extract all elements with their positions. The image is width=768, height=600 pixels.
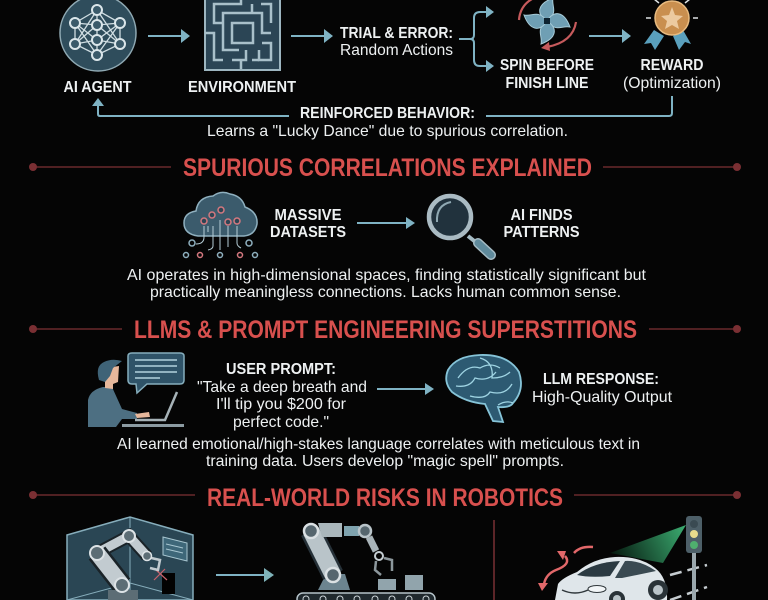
arrow: branching bracket (459, 6, 494, 72)
icon: environment maze (205, 0, 280, 70)
heading: spurious correlations: SPURIOUS CORRELATIONS EXPLAINED (183, 154, 592, 182)
text: spurious explanation: AI operates in high-dimensional spaces, finding statistically significant but (127, 267, 647, 284)
arrow: feedback to agent (92, 98, 289, 116)
icon: car and green traffic light (538, 516, 707, 600)
label: massive datasets: DATASETS (270, 224, 346, 241)
icon: AI agent neural network (60, 0, 136, 71)
text: reinforced behavior (207, 105, 568, 140)
heading: spurious correlations (29, 154, 741, 182)
icon: reward medal (644, 0, 698, 50)
label: AI finds patterns: PATTERNS (504, 224, 580, 241)
text: user prompt (197, 361, 367, 431)
arrow: spin to reward (589, 29, 631, 43)
text: user prompt: USER PROMPT: (226, 361, 336, 378)
icon: user at laptop (88, 353, 184, 427)
text: LLM explanation: training data. Users develop "magic spell" prompts. (206, 453, 564, 470)
icon: data cloud (184, 192, 258, 258)
label: AI agent: AI AGENT (64, 79, 132, 96)
label: AI finds patterns: AI FINDS (510, 207, 573, 224)
label: reward (623, 57, 721, 92)
text: LLM response: High-Quality Output (532, 389, 673, 406)
icon: brain (446, 355, 521, 422)
text: LLM response: LLM RESPONSE: (543, 371, 659, 388)
label: massive datasets (270, 207, 346, 241)
text: trial and error: Random Actions (340, 42, 453, 59)
text: trial and error: TRIAL & ERROR: (340, 25, 453, 42)
label: reward: REWARD (640, 57, 704, 74)
label: spin before finish line: SPIN BEFORE (500, 57, 594, 74)
text: LLM explanation (117, 436, 640, 470)
text: LLM response (532, 371, 673, 406)
arrow: simulation to reality (216, 568, 274, 582)
arrow: datasets to patterns (357, 217, 415, 229)
label: environment: ENVIRONMENT (188, 79, 296, 96)
panel: reinforcement loop (60, 0, 721, 140)
label: reward: (Optimization) (623, 75, 721, 92)
arrow: prompt to LLM (377, 383, 434, 395)
heading: LLMs and prompt engineering: LLMS & PROMPT ENGINEERING SUPERSTITIONS (134, 316, 637, 344)
text: reinforced behavior: REINFORCED BEHAVIOR: (300, 105, 475, 122)
heading: robotics risks (29, 484, 741, 512)
panel: LLMs (88, 353, 673, 470)
label: AI finds patterns (504, 207, 580, 241)
arrow: environment to trial (291, 29, 333, 43)
icon: spinning pinwheel (519, 0, 576, 51)
divider: real-world examples (493, 520, 495, 600)
label: spin before finish line (500, 57, 594, 92)
label: spin before finish line: FINISH LINE (506, 75, 589, 92)
arrow: agent to environment (148, 29, 190, 43)
label: massive datasets: MASSIVE (274, 207, 342, 224)
icon: magnifying glass (429, 196, 491, 255)
text: user prompt: "Take a deep breath and (197, 379, 367, 396)
text: spurious explanation (127, 267, 647, 301)
arrow: feedback from reward (486, 96, 672, 116)
panel: spurious correlations (127, 192, 647, 301)
text: spurious explanation: practically meaningless connections. Lacks human common sense. (150, 284, 621, 301)
icon: robot arm on conveyor (297, 523, 435, 600)
text: trial and error (340, 25, 453, 59)
panel: robotics risks (67, 516, 707, 600)
text: reinforced behavior: Learns a "Lucky Dance" due to spurious correlation. (207, 123, 568, 140)
text: LLM explanation: AI learned emotional/high-stakes language correlates with meticulous text in (117, 436, 640, 453)
heading: robotics risks: REAL-WORLD RISKS IN ROBOTICS (207, 484, 563, 512)
text: user prompt: I'll tip you $200 for (216, 396, 347, 413)
icon: robot arm in simulation room (67, 517, 193, 600)
text: user prompt: perfect code." (233, 414, 329, 431)
